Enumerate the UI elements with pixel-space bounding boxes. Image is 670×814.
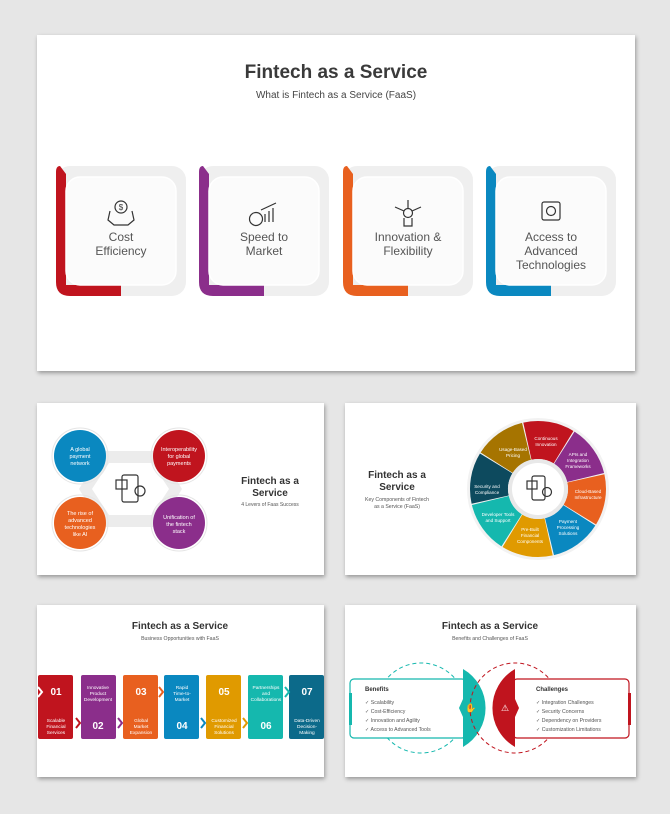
heading: Fintech as a Service (132, 621, 229, 632)
circle: interoperability: payments (167, 461, 191, 467)
card: advanced tech: Technologies (516, 258, 586, 272)
card: speed to market (199, 166, 329, 296)
chevron steps: Development (84, 697, 113, 703)
card: innovation: Flexibility (383, 244, 433, 258)
ring chart: Infrastructure (574, 495, 602, 500)
ring chart: Continuous (534, 436, 558, 441)
circle: advanced tech: The rise of (67, 511, 93, 517)
panel: 4 levers (37, 403, 324, 575)
chevron steps: Solutions (214, 730, 234, 736)
challenges block (470, 663, 631, 753)
benefits block: ✓ Cost-Efficiency (365, 709, 406, 715)
circle: unification (151, 495, 207, 551)
icon: phone (116, 475, 145, 502)
subtitle: What is Fintech as a Service (FaaS) (256, 90, 416, 101)
icon: chip (542, 202, 560, 220)
circle: interoperability: Interoperability (161, 447, 197, 453)
chevron steps: 02 (92, 721, 104, 732)
chevron steps: 07 (301, 687, 313, 698)
panel: benefits and challenges (345, 605, 636, 777)
chevron steps: Market (134, 724, 149, 730)
panel: business opportunities: Business Opportunities with FaaS (141, 636, 219, 642)
chevron steps: Collaborations (251, 697, 282, 703)
card: advanced tech: Advanced (524, 244, 578, 258)
chevron steps: and (262, 691, 270, 697)
benefits block: Benefits (365, 687, 389, 693)
ring chart: Security and (474, 484, 500, 489)
ring chart: Integration (567, 458, 589, 463)
card: advanced tech (486, 166, 616, 296)
circle: advanced tech: like AI (73, 532, 88, 538)
chevron steps: Expansion (130, 730, 153, 736)
icon: hands coin: $ (119, 203, 124, 212)
challenges block: ✓ Integration Challenges (536, 700, 594, 706)
card: advanced tech: Access to (525, 230, 577, 244)
challenges block: ✓ Security Concerns (536, 709, 585, 715)
icon: arrows (395, 200, 421, 226)
chevron steps: Making (299, 730, 315, 736)
ring chart: Processing (557, 525, 580, 530)
circle: unification: stack (173, 529, 186, 535)
heading: Fintech as a (241, 476, 299, 487)
chevron steps: Partnerships (253, 685, 280, 691)
benefits block: ✓ Access to Advanced Tools (365, 727, 431, 733)
benefits block: ✋ (465, 702, 477, 713)
circle: global payment network: payment (69, 454, 91, 460)
ring chart: Financial (521, 533, 539, 538)
circle: advanced tech: advanced (68, 518, 92, 524)
hexagon band (79, 451, 182, 527)
chevron steps: Product (90, 691, 107, 697)
ring chart: APIs and (569, 452, 588, 457)
chevron steps: Financial (46, 724, 66, 730)
ring chart: Payment (559, 519, 578, 524)
ring chart: Components (517, 539, 544, 544)
heading: Key Components of Fintech (365, 497, 429, 503)
chevron steps: Time-to- (173, 691, 191, 697)
card: speed to market: Market (246, 244, 283, 258)
ring chart: Developer Tools (482, 512, 515, 517)
panel: key components (345, 403, 636, 575)
ring chart: Pre-Built (521, 527, 540, 532)
ring chart: Solutions (559, 531, 578, 536)
ring chart: Cloud-Based (575, 489, 602, 494)
chevron steps: Decision- (297, 724, 317, 730)
heading: Fintech as a Service (442, 621, 539, 632)
panel: main slide (37, 35, 635, 371)
panel: business opportunities (37, 605, 324, 777)
heading: Service (379, 482, 415, 493)
circle: global payment network (52, 428, 108, 484)
challenges block: ⚠ (501, 703, 509, 713)
chevron steps: Global (134, 718, 148, 724)
circle: interoperability: for global (168, 454, 190, 460)
heading: as a Service (FaaS) (374, 504, 420, 510)
benefits block: ✓ Innovation and Agility (365, 718, 420, 724)
ring chart: Innovation (535, 442, 557, 447)
challenges block: Challenges (536, 687, 569, 693)
chevron steps (38, 675, 324, 739)
heading (365, 470, 429, 510)
ring chart: and Support (485, 518, 511, 523)
challenges block: ✓ Dependency on Providers (536, 718, 602, 724)
heading: 4 Levers of Faas Success (241, 502, 299, 508)
card: cost efficiency: Cost (109, 230, 134, 244)
card: speed to market: Speed to (240, 230, 288, 244)
icon: phone (527, 476, 552, 500)
chevron steps: 01 (50, 687, 62, 698)
heading: Service (252, 488, 288, 499)
ring chart: Pricing (506, 453, 520, 458)
chevron steps: 03 (135, 687, 147, 698)
icon: stopwatch chart (250, 203, 276, 226)
circle: global payment network: A global (70, 447, 90, 453)
chevron steps: Financial (214, 724, 234, 730)
benefits block (349, 663, 486, 753)
panel: benefits and challenges: Benefits and Challenges of FaaS (452, 636, 528, 642)
circle: unification: Unification of (163, 515, 195, 521)
title: Fintech as a Service (245, 62, 427, 83)
card: innovation: Innovation & (375, 230, 441, 244)
circle: global payment network: network (70, 461, 90, 467)
challenges block: ✓ Customization Limitations (536, 727, 601, 733)
benefits block: ✓ Scalability (365, 700, 395, 706)
card: cost efficiency: Efficiency (95, 244, 147, 258)
chevron steps: 05 (218, 687, 230, 698)
chevron steps: 06 (260, 721, 272, 732)
circle: advanced tech (52, 495, 108, 551)
heading (241, 476, 299, 508)
ring chart (467, 418, 609, 560)
chevron steps: Innovative (87, 685, 109, 691)
chevron steps: 04 (176, 721, 188, 732)
ring chart: Usage-Based (499, 447, 527, 452)
circle: interoperability (151, 428, 207, 484)
chevron steps: Scalable (47, 718, 66, 724)
chevron steps: Market (175, 697, 190, 703)
chevron steps: Rapid (176, 685, 189, 691)
chevron steps: Customized (211, 718, 237, 724)
ring chart: Compliance (475, 490, 500, 495)
circle: unification: the fintech (166, 522, 192, 528)
ring chart: Frameworks (565, 464, 591, 469)
chevron steps: Data-Driven (294, 718, 320, 724)
card: cost efficiency (56, 166, 186, 296)
card: innovation (343, 166, 473, 296)
circle: advanced tech: technologies (65, 525, 96, 531)
chevron steps: Services (47, 730, 66, 736)
heading: Fintech as a (368, 470, 426, 481)
